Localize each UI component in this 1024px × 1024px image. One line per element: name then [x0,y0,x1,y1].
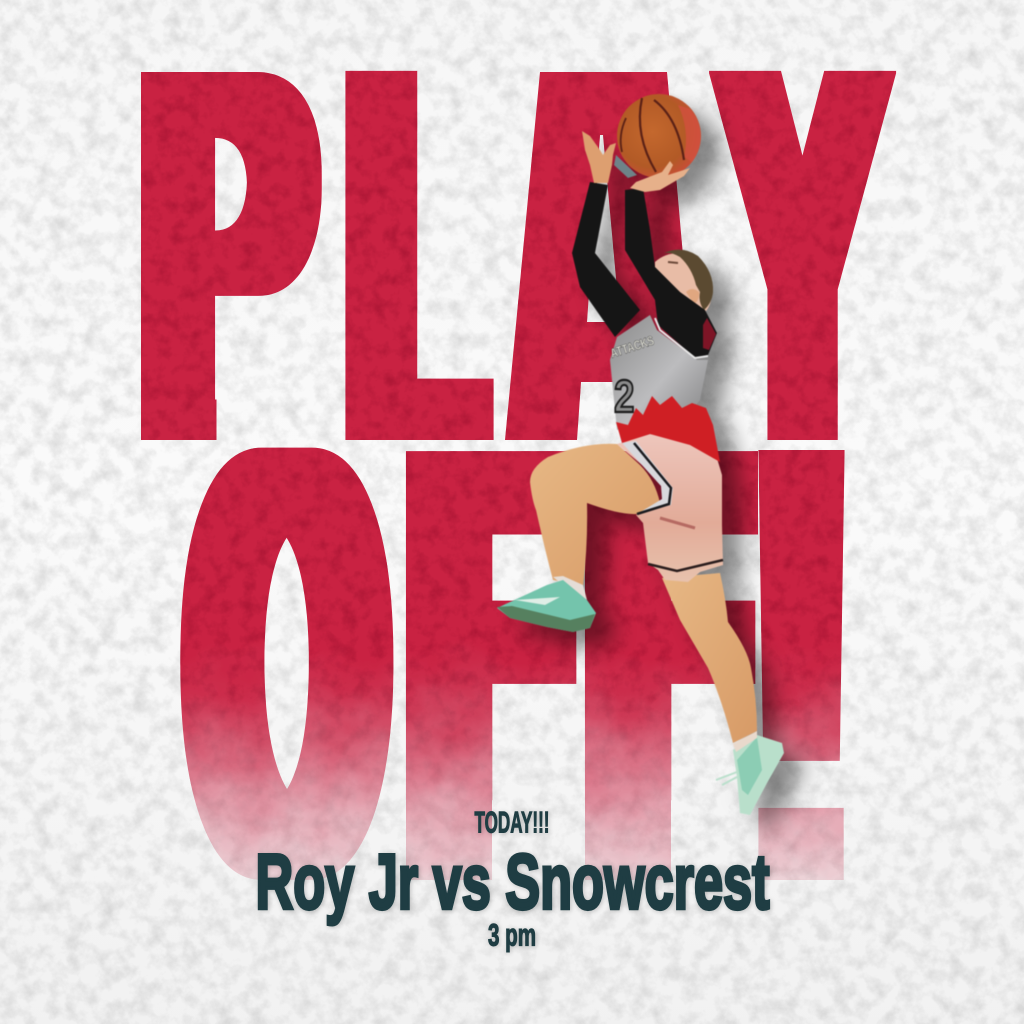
letter P [141,72,322,440]
matchup title: Roy Jr vs Snowcrest [256,838,770,926]
shorts side stripe [622,441,673,514]
exclamation mark: ! [750,311,853,1024]
event details [256,806,770,952]
game time: 3 pm [488,918,536,952]
today label: TODAY!!! [474,806,550,840]
letter F first: F [416,367,562,882]
jersey lettering: ATTACKS [608,333,656,361]
shorts black piping [634,443,671,514]
basketball player photo cut-out [497,94,784,815]
far shoe [716,731,784,815]
head [655,250,713,312]
left hand [582,131,616,183]
right hand [630,161,690,192]
jersey number: 2 [614,370,634,422]
left raised arm [572,182,640,337]
near shoe [497,576,596,632]
letter O: O [196,326,378,999]
grey jersey [608,315,708,430]
letter F second: F [595,367,741,882]
right raised arm and sleeve [625,188,717,358]
far leg [662,573,757,743]
basketball [614,94,701,178]
headline: PLAY OFF! [141,70,896,880]
shorts [617,434,723,582]
red jersey hem [616,396,720,462]
raised thigh and calf [530,444,660,586]
